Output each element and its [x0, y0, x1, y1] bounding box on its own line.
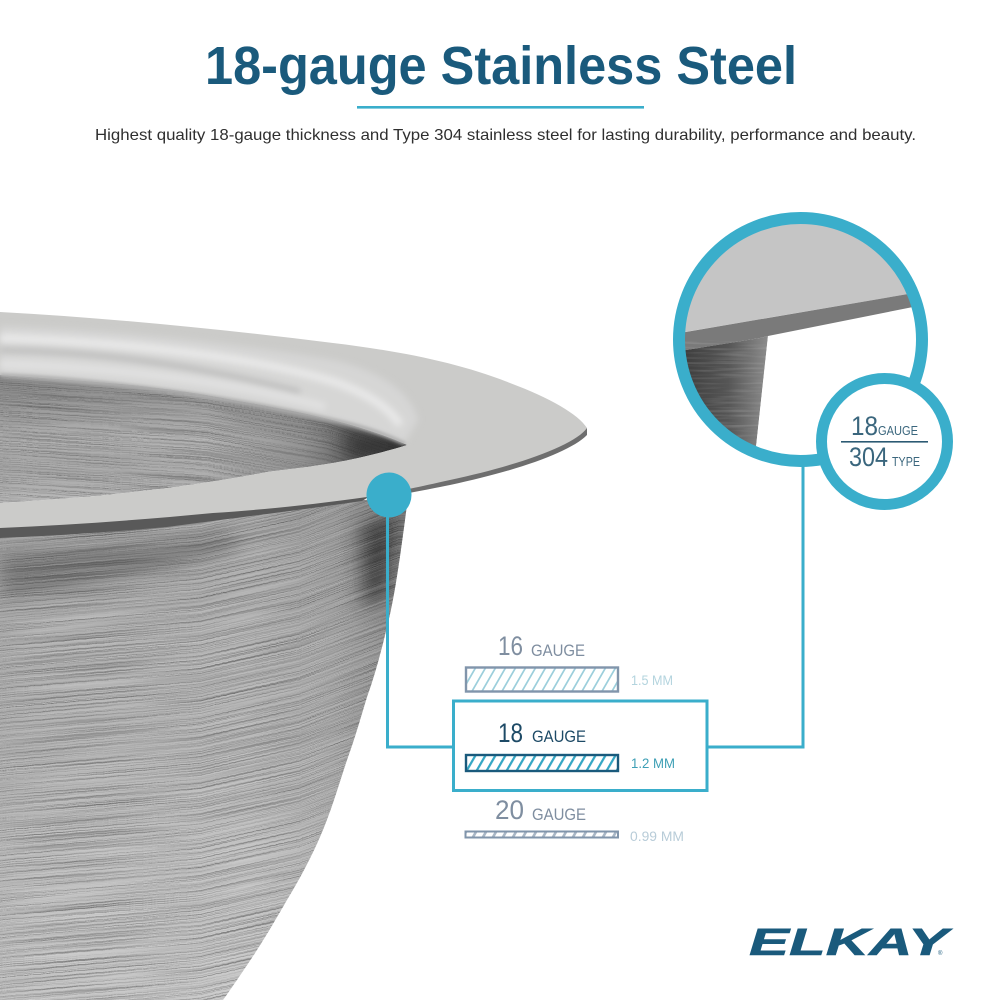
logo: Elkay: ELKAY [749, 922, 954, 964]
spec badge: TYPE [892, 454, 920, 469]
plate surface [685, 224, 906, 332]
gauge comparison: 18 gauge highlighted box: 18 [498, 718, 523, 748]
spec badge [822, 378, 948, 504]
gauge comparison: 20 gauge: 0.99 MM [630, 829, 684, 844]
gauge comparison: 16 gauge: 16 [498, 631, 523, 661]
304 type label: 304 [849, 442, 888, 472]
gauge comparison: 18 gauge highlighted box [454, 701, 707, 790]
rim dark band [0, 495, 372, 538]
subtitle: Highest quality 18-gauge thickness and Type 304 stainless steel for lasting durability, performance and beauty. [95, 127, 916, 144]
rim top surface [0, 312, 587, 528]
white mask right of wedge [756, 336, 790, 460]
gauge comparison: 20 gauge: GAUGE [532, 805, 586, 824]
logo: Elkay [749, 922, 954, 964]
gauge comparison: 16 gauge: 1.5 MM [631, 673, 673, 688]
bowl interior [0, 370, 410, 510]
title: 18-gauge Stainless Steel [205, 36, 797, 96]
gauge comparison: 20 gauge [466, 795, 684, 844]
gauge comparison: 18 gauge highlighted box: GAUGE [532, 727, 586, 746]
fraction rule [841, 441, 928, 443]
rim underside edge [370, 428, 587, 499]
gauge comparison: 16 gauge [466, 631, 673, 692]
bowl exterior [0, 495, 415, 1000]
gauge comparison: 16 gauge: GAUGE [531, 641, 585, 660]
gauge comparison: 20 gauge: 20 [495, 795, 524, 825]
callout dot [366, 472, 412, 518]
title underline [357, 106, 644, 109]
connector line right [707, 460, 803, 747]
gauge comparison: 18 gauge highlighted box: 1.2 MM [631, 756, 675, 771]
rim raised ridge [0, 326, 418, 444]
bowl wedge [680, 336, 768, 447]
sink bowl photograph [0, 312, 587, 1000]
logo: Elkay: ® [938, 950, 943, 957]
spec badge: GAUGE [878, 423, 918, 438]
zoom circle: rim detail [679, 218, 922, 461]
plate thickness edge [685, 294, 912, 350]
connector line left [388, 505, 453, 747]
18 gauge label: 18 [851, 411, 878, 441]
